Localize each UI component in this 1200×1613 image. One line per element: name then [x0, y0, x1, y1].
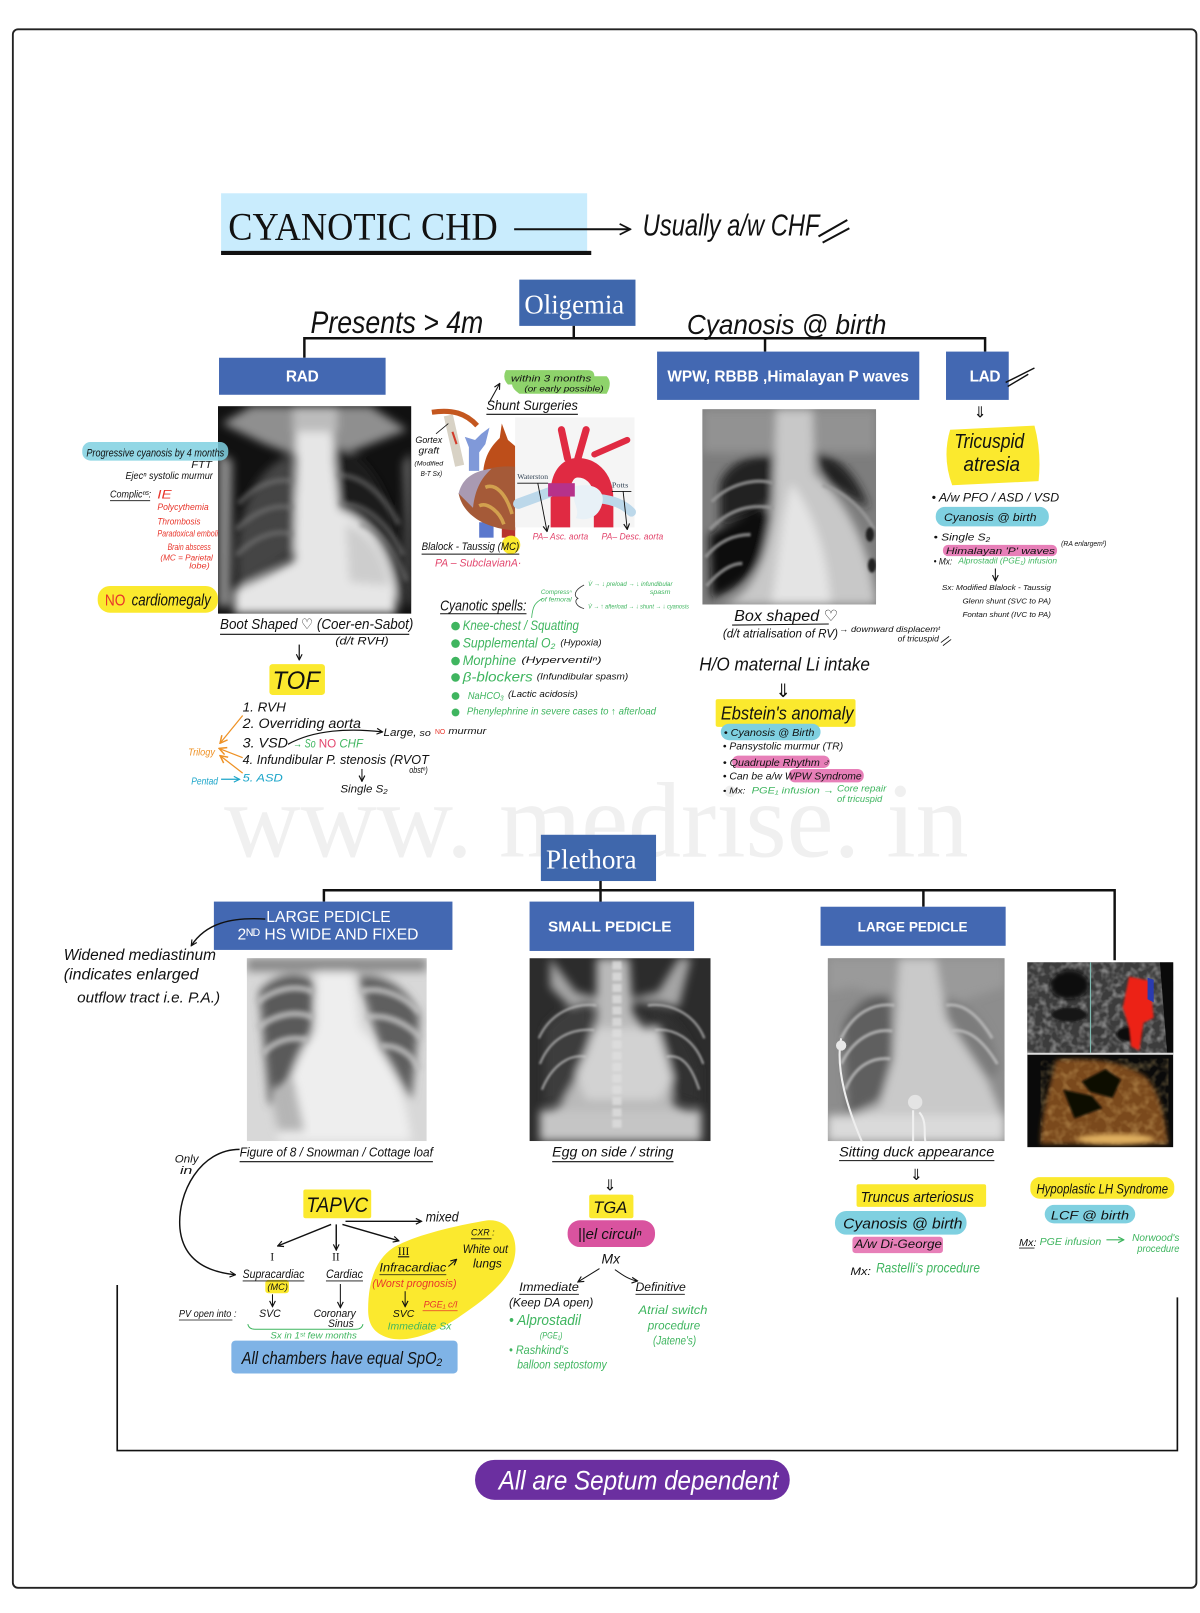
- list: spell management: (Infundibular spasm): [537, 672, 628, 682]
- highlight: MC tag: [265, 1280, 289, 1293]
- label: cyanosis at birth: Cyanosis @ birth: [687, 309, 886, 340]
- list: spell management: (Hypoxia): [560, 638, 602, 648]
- labels: Gortex graft: B-T Sx): [421, 469, 442, 478]
- panel: tricuspid atresia: Tricuspid: [954, 430, 1025, 453]
- list: TOF features: 3. VSD: [243, 735, 288, 750]
- box: LAD: LAD: [970, 368, 1001, 385]
- panel: hypoplastic left heart notes: LCF @ birth: [1051, 1208, 1129, 1222]
- tree connectors: plethora: [324, 881, 1115, 960]
- highlight: Ebstein title: [716, 699, 856, 727]
- panel: tricuspid atresia: • Single S₂: [934, 533, 990, 544]
- tree connectors: oligemia: [304, 326, 985, 358]
- highlight: TOF: TOF: [272, 668, 322, 695]
- pill: all are septum dependent: All are Septum dependent: [497, 1466, 780, 1496]
- panel: left notes on TOF: lobe): [189, 562, 210, 571]
- panel: TGA management: (Jatene's): [653, 1334, 696, 1348]
- caption: box shaped heart: → downward displacemᵗ: [839, 625, 941, 634]
- panel: hypoplastic left heart notes: Norwood's: [1132, 1233, 1179, 1244]
- panel: Ebstein anomaly: [716, 699, 888, 804]
- panel: hypoplastic left heart notes: Mx:: [1019, 1238, 1037, 1249]
- label: Blalock-Taussig: [422, 536, 521, 569]
- labels: Gortex graft: Gortex: [415, 435, 443, 445]
- panel: TGA management: (PGE₁): [540, 1331, 562, 1341]
- panel: tricuspid atresia: Himalayan 'P' waves: [946, 546, 1055, 556]
- pill: parallel circulation: [568, 1220, 655, 1247]
- echo images: hypoplastic left heart: [1027, 962, 1173, 1147]
- panel: TGA management: [509, 1251, 708, 1371]
- panel: cyanotic spells: [440, 580, 690, 717]
- labels: shunt anatomy: PA– Desc. aorta: [602, 532, 663, 542]
- box: WPW RBBB: WPW, RBBB ,Himalayan P waves: [667, 368, 909, 385]
- panel: shunt surgeries: [486, 370, 610, 414]
- arrow: egg to TGA: ⇓: [604, 1177, 617, 1194]
- list: TOF features: 2. Overriding aorta: [242, 716, 361, 731]
- panel: shunt surgeries: within 3 months: [511, 373, 592, 383]
- panel: Ebstein anomaly: • Mx:: [723, 787, 746, 796]
- panel: infracardiac notes: Immediate Sx: [388, 1321, 453, 1332]
- box: WPW RBBB: [657, 352, 919, 400]
- list: TOF features: NO: [319, 736, 336, 750]
- panel: infracardiac notes: Infracardiac: [379, 1261, 447, 1275]
- list: spell management: (Lactic acidosis): [508, 689, 578, 699]
- panel: infracardiac notes: CXR :: [471, 1228, 495, 1238]
- arrow: only in supracardiac: [175, 1149, 240, 1275]
- panel: tricuspid atresia: • A/w PFO / ASD / VSD: [932, 491, 1059, 505]
- panel: truncus arteriosus: Cyanosis @ birth: [843, 1217, 962, 1233]
- panel: tricuspid atresia: [932, 426, 1107, 619]
- panel: left notes on TOF: Thrombosis: [157, 516, 201, 526]
- box: RAD: RAD: [286, 368, 319, 385]
- callout: no cardiomegaly: cardiomegaly: [132, 592, 212, 610]
- labels: trilogy and pentad: Pentad: [191, 776, 218, 787]
- caption: box shaped heart: [723, 608, 951, 646]
- caption: box shaped heart: Box shaped ♡: [734, 608, 838, 625]
- box: RAD: [219, 358, 386, 395]
- list: spell management: (Hyperventilⁿ): [521, 655, 602, 665]
- list: TOF features: obstⁿ): [409, 765, 428, 775]
- panel: left notes on TOF: FTT: [191, 460, 213, 471]
- panel: tricuspid atresia: • Mx:: [934, 556, 953, 566]
- panel: hypoplastic left heart notes: PGE infusion: [1040, 1237, 1102, 1248]
- list: TOF features: Single S₂: [340, 784, 388, 796]
- arrow: lithium to Ebstein: ⇓: [775, 680, 791, 701]
- panel: tricuspid atresia: atresia: [963, 453, 1020, 476]
- panel: Ebstein anomaly: • Can be a/w WPW Syndrome: [723, 771, 862, 782]
- note: widened mediastinum: outflow tract i.e. P.A.): [77, 990, 220, 1006]
- panel: TGA management: Mx: [602, 1251, 621, 1266]
- box: large pedicle, S2 wide and fixed: LARGE PEDICLE: [266, 909, 391, 926]
- heading: Plethora: Plethora: [546, 845, 637, 876]
- panel: left notes on TOF: Progressive cyanosis by 4 months: [86, 447, 225, 459]
- list: TOF features: 1. RVH: [243, 699, 287, 714]
- panel: tricuspid atresia: Fontan shunt (IVC to PA): [962, 610, 1051, 619]
- labels: shunt anatomy: Potts: [612, 480, 628, 489]
- box: large pedicle (truncus): [821, 907, 1006, 946]
- caption: sitting duck: Sitting duck appearance: [839, 1144, 995, 1160]
- panel: cyanotic spells: Compressⁿ: [541, 589, 572, 596]
- note: widened mediastinum: [64, 919, 265, 1006]
- panel: infracardiac notes: III: [398, 1246, 409, 1258]
- arrow: only in supracardiac: Only: [175, 1154, 200, 1166]
- panel: TAPVC types: [179, 1251, 364, 1341]
- illustration: heart with Gortex graft: [432, 411, 515, 538]
- pill: all are septum dependent: [475, 1460, 790, 1500]
- x-ray: egg on side: [530, 958, 711, 1141]
- label: Blalock-Taussig: Blalock - Taussig (MC): [422, 541, 519, 553]
- arrow: LAD to tricuspid atresia: ⇓: [974, 404, 987, 421]
- list: TOF features: so: [420, 728, 431, 738]
- panel: hypoplastic left heart notes: Hypoplastic LH Syndrome: [1037, 1182, 1168, 1197]
- panel: left notes on TOF: Brain abscess: [168, 542, 211, 552]
- panel: TAPVC types: Supracardiac: [243, 1267, 305, 1281]
- highlight: TGA: TGA: [593, 1199, 627, 1217]
- arrow: duck to truncus: ⇓: [910, 1167, 923, 1184]
- panel: infracardiac notes: PGE₁ c/I: [424, 1300, 458, 1310]
- title block: CYANOTIC CHD: [228, 206, 498, 249]
- panel: tricuspid atresia: Alprostadil (PGE₁) infusion: [957, 556, 1057, 565]
- panel: Ebstein anomaly: • Pansystolic murmur (TR): [723, 741, 843, 752]
- x-ray: box shaped heart: [702, 409, 876, 604]
- panel: infracardiac notes: SVC: [393, 1309, 415, 1320]
- heading: Plethora: [541, 835, 656, 881]
- panel: infracardiac notes: lungs: [473, 1257, 502, 1271]
- panel: Ebstein anomaly: of tricuspid: [837, 794, 883, 804]
- panel: TAPVC types: PV open into :: [179, 1309, 237, 1320]
- panel: TGA management: (Keep DA open): [509, 1296, 593, 1310]
- heading: Oligemia: Oligemia: [524, 290, 624, 321]
- title block: [221, 193, 591, 255]
- panel: hypoplastic left heart notes: procedure: [1136, 1244, 1180, 1255]
- panel: Ebstein anomaly: • Cyanosis @ Birth: [724, 728, 814, 739]
- panel: TAPVC types: (MC): [267, 1282, 288, 1292]
- panel: left notes on TOF: (MC = Parietal: [160, 553, 214, 562]
- panel: TAPVC types: SVC: [259, 1308, 281, 1320]
- arrows: TAPVC types: mixed: [426, 1209, 459, 1224]
- highlight: TGA: [589, 1195, 633, 1218]
- panel: left notes on TOF: Complicⁿˢ:: [110, 490, 151, 501]
- list: TOF features: 4. Infundibular P. stenosis (RVOT: [243, 752, 430, 767]
- labels: shunt anatomy: PA– Asc. aorta: [533, 532, 588, 542]
- panel: TAPVC types: Coronary: [314, 1308, 356, 1320]
- label: Blalock-Taussig: PA – SubclavianA·: [435, 557, 521, 569]
- labels: Gortex graft: graft: [419, 445, 440, 455]
- panel: infracardiac notes: (Worst prognosis): [372, 1278, 457, 1290]
- list: spell management: Phenylephrine in severe cases to ↑ afterload: [467, 706, 657, 717]
- panel: TGA management: balloon septostomy: [517, 1357, 607, 1371]
- x-ray: boot shaped heart: [218, 406, 411, 614]
- list: spell management: β-blockers: [462, 670, 533, 685]
- panel: TAPVC types: Sinus: [328, 1318, 354, 1330]
- labels: Gortex graft: (Modified: [414, 461, 443, 468]
- panel: tricuspid atresia: Cyanosis @ birth: [944, 512, 1037, 524]
- x-ray: snowman heart: [247, 958, 427, 1141]
- labels: trilogy and pentad: Trilogy: [188, 748, 216, 759]
- arrows: TAPVC types: [278, 1209, 459, 1250]
- caption: box shaped heart: of tricuspid: [898, 634, 939, 643]
- list: TOF features: Large,: [384, 727, 416, 739]
- caption: boot shaped heart: (d/t RVH): [335, 636, 389, 648]
- panel: left notes on TOF: Paradoxical emboli: [157, 529, 219, 539]
- pill: parallel circulation: ||el circulⁿ: [578, 1227, 642, 1243]
- label: presents after 4 months: Presents > 4m: [311, 304, 483, 340]
- box: large pedicle, S2 wide and fixed: 2ᴺᴰ HS WIDE AND FIXED: [238, 927, 419, 944]
- arrow: boot heart to TOF: [298, 645, 300, 660]
- box: large pedicle, S2 wide and fixed: [214, 902, 452, 950]
- highlight: progressive cyanosis: [82, 442, 228, 461]
- heading: Oligemia: [519, 280, 635, 326]
- labels: shunt anatomy: [517, 472, 663, 542]
- list: spell management: NaHCO₃: [468, 691, 504, 702]
- panel: shunt surgeries: (or early possible): [524, 385, 604, 394]
- panel: Ebstein anomaly: • Quadruple Rhythm ♂: [723, 758, 831, 769]
- panel: left notes on TOF: IE: [157, 488, 173, 502]
- note: widened mediastinum: (indicates enlarged: [64, 967, 199, 984]
- list: TOF features: [242, 699, 487, 796]
- panel: TGA management: • Rashkind's: [509, 1343, 569, 1357]
- list: TOF features: murmur: [448, 726, 487, 736]
- panel: TGA management: procedure: [647, 1318, 700, 1332]
- panel: truncus arteriosus: Rastelli's procedure: [876, 1261, 980, 1276]
- list: TOF features: 5. ASD: [243, 772, 283, 784]
- arrow: title to note: [514, 228, 630, 230]
- watermark: www. medrise. in: [224, 762, 969, 880]
- panel: cyanotic spells: V̇ → ↓ preload → ↓ infundibular: [588, 580, 673, 588]
- illustration: aortopulmonary shunts: [515, 417, 634, 527]
- panel: cyanotic spells: spasm: [650, 589, 671, 596]
- panel: Ebstein anomaly: Ebstein's anomaly: [721, 703, 855, 724]
- caption: boot shaped heart: [220, 617, 413, 648]
- list: spell management: Knee-chest / Squatting: [463, 618, 579, 633]
- callout: no cardiomegaly: NO: [105, 593, 125, 610]
- panel: infracardiac notes: [372, 1228, 508, 1332]
- highlight: infracardiac blob: [368, 1220, 515, 1339]
- labels: trilogy and pentad: [188, 716, 243, 787]
- box: small pedicle: SMALL PEDICLE: [548, 919, 672, 935]
- panel: tricuspid atresia: Sx: Modified Blalock - Taussig: [942, 583, 1052, 592]
- note: usually a/w CHF: Usually a/w CHF: [643, 207, 821, 242]
- panel: cyanotic spells: V̇ → ↑ afterload → ↓ shunt → ↓ cyanosis: [588, 603, 690, 611]
- panel: TGA management: Immediate: [519, 1280, 579, 1294]
- caption: figure of 8: Figure of 8 / Snowman / Cottage loaf: [240, 1145, 434, 1160]
- panel: cyanotic spells: of femoral: [541, 596, 572, 603]
- caption: egg on side: Egg on side / string: [552, 1145, 674, 1160]
- box: large pedicle (truncus): LARGE PEDICLE: [858, 919, 968, 934]
- panel: TAPVC types: II: [332, 1251, 340, 1263]
- panel: left notes on TOF: [82, 442, 228, 571]
- panel: TGA management: Atrial switch: [638, 1303, 708, 1317]
- box: LAD: [946, 352, 1034, 400]
- panel: Ebstein anomaly: PGE₁ infusion →: [752, 786, 834, 796]
- panel: tricuspid atresia: Glenn shunt (SVC to PA): [962, 596, 1051, 605]
- highlight: within 3 months: [504, 370, 610, 394]
- callout: all chambers equal SpO2: [231, 1341, 458, 1373]
- note: maternal lithium intake: H/O maternal Li intake: [699, 653, 870, 674]
- panel: hypoplastic left heart notes: [1019, 1177, 1180, 1255]
- labels: shunt anatomy: Waterston: [517, 472, 548, 481]
- list: spell management: Supplemental O₂: [463, 636, 555, 651]
- bracket: septum dependent: [117, 1285, 1177, 1451]
- panel: infracardiac notes: White out: [463, 1242, 508, 1256]
- list: TOF features: → So: [293, 736, 316, 750]
- panel: TAPVC types: Sx in 1ˢᵗ few months: [270, 1331, 358, 1341]
- panel: truncus arteriosus: Mx:: [850, 1266, 871, 1278]
- panel: tricuspid atresia: (RA enlargemᵗ): [1061, 539, 1107, 548]
- highlight: tricuspid atresia title: [946, 426, 1039, 485]
- panel: TGA management: Definitive: [635, 1280, 686, 1294]
- list: TOF features: CHF: [339, 736, 364, 750]
- panel: TAPVC types: I: [270, 1251, 274, 1263]
- panel: truncus arteriosus: Truncus arteriosus: [861, 1190, 974, 1206]
- panel: Ebstein anomaly: Core repair: [837, 784, 888, 794]
- arrow: only in supracardiac: in: [180, 1165, 192, 1177]
- caption: boot shaped heart: Boot Shaped ♡ (Coer-en-Sabot): [220, 617, 413, 633]
- panel: TAPVC types: Cardiac: [326, 1267, 364, 1281]
- panel: shunt surgeries: Shunt Surgeries: [486, 398, 578, 413]
- callout: no cardiomegaly: [98, 586, 218, 613]
- list: spell management: [451, 618, 657, 717]
- box: small pedicle: [530, 902, 694, 951]
- panel: truncus arteriosus: A/w Di-George: [853, 1237, 942, 1251]
- labels: Gortex graft: [414, 424, 448, 478]
- list: spell management: Morphine: [463, 653, 516, 668]
- note: widened mediastinum: Widened mediastinum: [64, 947, 216, 964]
- panel: TGA management: • Alprostadil: [509, 1313, 582, 1329]
- callout: all chambers equal SpO2: All chambers have equal SpO₂: [241, 1348, 442, 1368]
- caption: box shaped heart: (d/t atrialisation of RV): [723, 626, 838, 640]
- panel: cyanotic spells: Cyanotic spells:: [440, 599, 526, 615]
- x-ray: sitting duck: [828, 958, 1005, 1141]
- panel: left notes on TOF: Ejecⁿ systolic murmur: [125, 471, 213, 482]
- list: TOF features: NO: [435, 727, 446, 736]
- panel: left notes on TOF: Polycythemia: [157, 502, 209, 512]
- panel: truncus arteriosus: [835, 1184, 986, 1278]
- highlight: TAPVC: TAPVC: [306, 1192, 368, 1217]
